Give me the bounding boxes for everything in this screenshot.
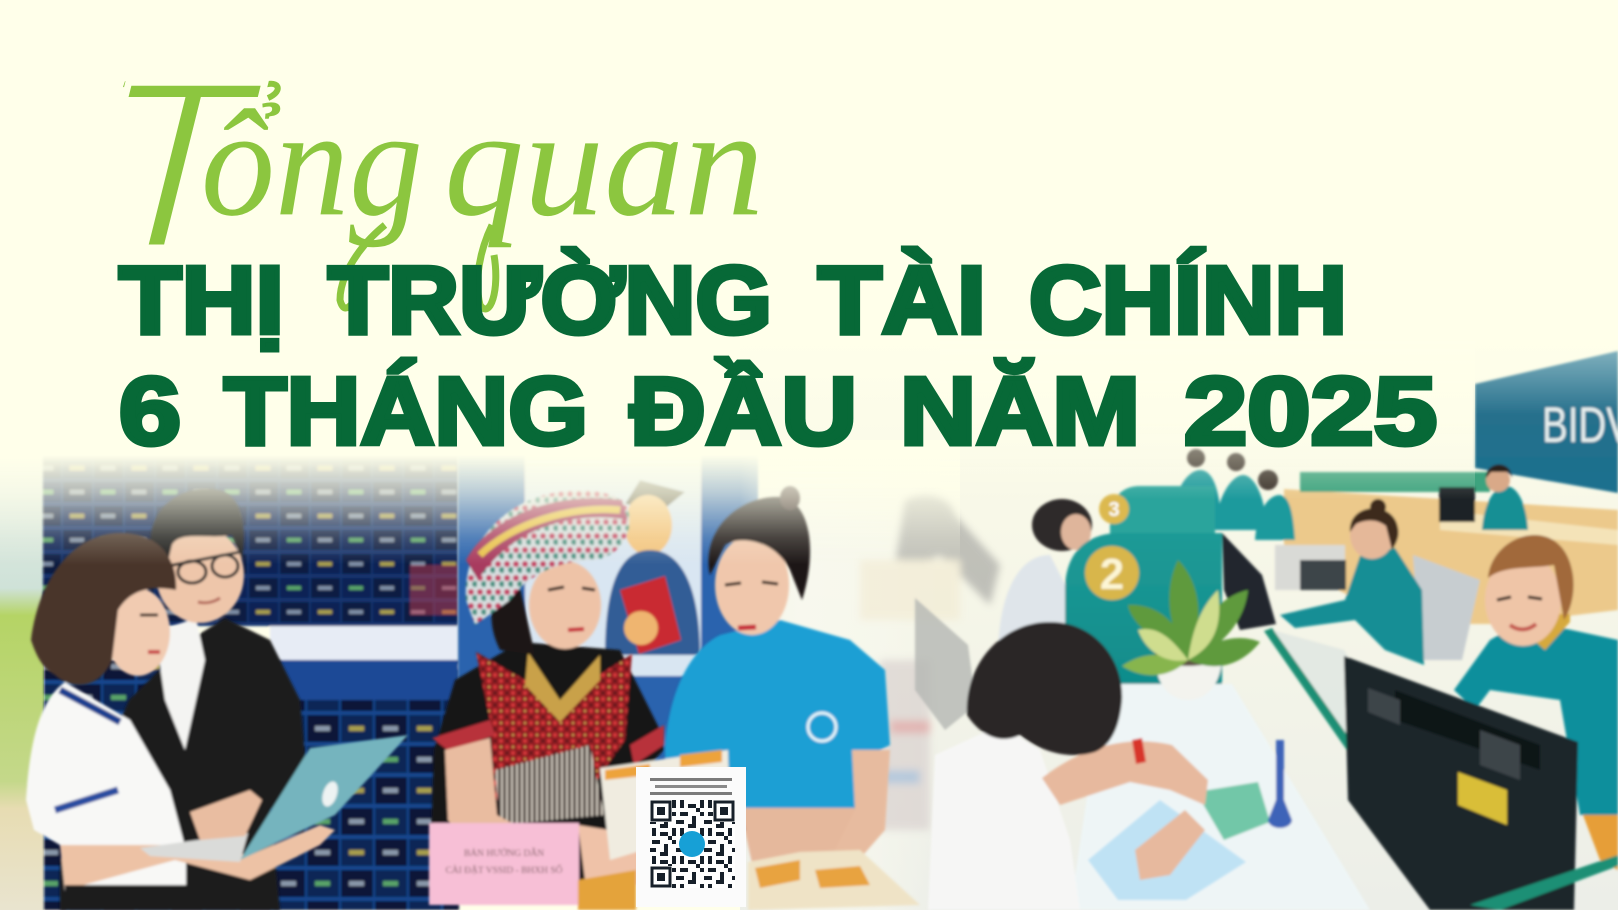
leaflet bbox=[600, 750, 730, 860]
sign text: BẢN HƯỚNG DẪN bbox=[464, 846, 544, 859]
sign text second line: CÀI ĐẶT VSSID - BHXH SỐ bbox=[445, 863, 563, 876]
panel: blue social insurance backdrop bbox=[458, 450, 758, 830]
left photo people bbox=[26, 486, 920, 910]
far agents bbox=[1170, 470, 1295, 540]
brush swash on the T bbox=[124, 84, 278, 98]
title: second line bbox=[119, 357, 1437, 465]
man in suit bbox=[60, 488, 307, 910]
form on desk bbox=[1088, 782, 1270, 900]
photo: financial services collage bbox=[0, 335, 1618, 910]
title: second line: NĂM bbox=[900, 358, 1140, 465]
ethnic minority woman bbox=[429, 491, 664, 905]
title: second line: 6 bbox=[119, 358, 181, 465]
small monitor back bbox=[1439, 487, 1475, 522]
right photo scene bbox=[915, 351, 1618, 910]
title: script line bbox=[69, 29, 764, 309]
woman in white polo bbox=[26, 533, 335, 910]
white desk bbox=[1070, 684, 1370, 910]
back agent bbox=[1482, 486, 1528, 530]
word: quan: quan bbox=[444, 76, 764, 248]
teller partitions bbox=[1065, 486, 1222, 685]
title: first line: TÀI bbox=[818, 247, 986, 354]
faded waiting area bbox=[860, 495, 1000, 830]
title: second line: ĐẦU bbox=[630, 357, 857, 465]
counter in the back bbox=[1284, 489, 1618, 624]
front teller bbox=[1454, 535, 1618, 815]
counter number 3: 3 bbox=[1108, 499, 1120, 521]
pink instruction sign bbox=[429, 823, 579, 905]
descender swashes bbox=[340, 225, 496, 309]
title: second line: 2025 bbox=[1184, 358, 1437, 465]
front customer bbox=[928, 622, 1208, 910]
panel: right scene backdrop base bbox=[740, 340, 1618, 910]
brochures on table bbox=[578, 870, 636, 910]
plant bbox=[1122, 560, 1260, 700]
fade: left to right transition bbox=[740, 440, 940, 910]
bank sign bbox=[1475, 351, 1618, 493]
top fade: right photo bbox=[940, 335, 1475, 500]
lower glass edge bbox=[1470, 855, 1618, 910]
word tail: ổng: ổng bbox=[201, 76, 423, 248]
title: first line bbox=[119, 247, 1347, 354]
QR code card bbox=[636, 767, 746, 907]
title: first line: TRƯỜNG bbox=[328, 247, 772, 354]
seated customer in back bbox=[998, 499, 1092, 660]
title: second line: THÁNG bbox=[224, 358, 588, 465]
letter T: T bbox=[69, 29, 284, 299]
money machines bbox=[1275, 545, 1345, 590]
mid teller bbox=[1280, 499, 1480, 665]
glass divider bbox=[1272, 630, 1470, 910]
woman in blue polo bbox=[665, 486, 890, 888]
laptop bbox=[140, 735, 408, 862]
panel: stock board bbox=[43, 450, 459, 910]
title: first line: THỊ bbox=[119, 247, 284, 354]
pen stand bbox=[1268, 740, 1292, 828]
title: first line: CHÍNH bbox=[1029, 247, 1347, 354]
orange pants bbox=[1583, 815, 1618, 870]
mid monitor bbox=[1222, 533, 1276, 630]
large monitor bbox=[1344, 656, 1578, 910]
top fade: left photo bbox=[0, 440, 960, 565]
panel: left wall bbox=[0, 450, 44, 910]
chair bbox=[915, 598, 976, 730]
counter number 2: 2 bbox=[1100, 550, 1124, 599]
